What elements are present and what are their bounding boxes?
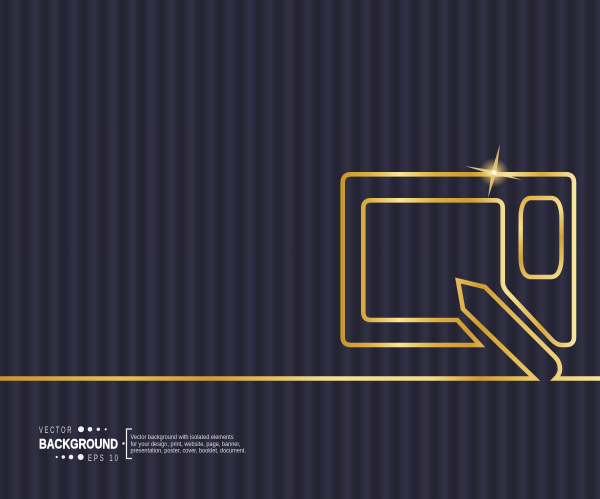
EPS 10 label: EPS 10	[88, 453, 120, 463]
logo text block	[39, 425, 120, 463]
description text: for your design, print, website, page, banner,	[130, 441, 241, 448]
bracket	[122, 429, 132, 458]
tablet and pen line icon	[0, 174, 600, 378]
bottom dots	[56, 454, 84, 460]
top dots	[78, 426, 107, 432]
tablet outer and screen outline	[343, 174, 574, 345]
description text	[130, 434, 246, 454]
VECTOR label: VECTOR	[39, 425, 73, 435]
sparkle	[465, 144, 522, 198]
BACKGROUND heading: BACKGROUND	[39, 436, 118, 452]
description text: Vector background with isolated elements	[130, 434, 234, 441]
pen and horizontal baseline	[0, 280, 600, 378]
side button	[521, 198, 562, 277]
description text: presentation, poster, cover, booklet, document.	[130, 448, 246, 454]
